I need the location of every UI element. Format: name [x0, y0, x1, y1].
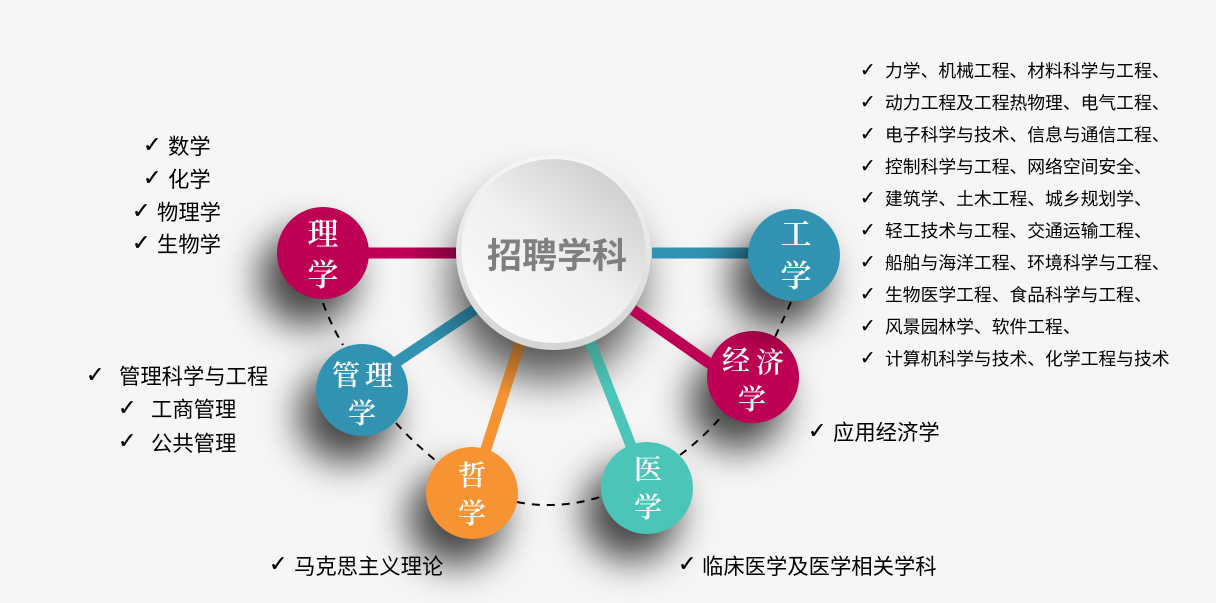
list: 工学: 生物医学工程、食品科学与工程、 [885, 285, 1152, 305]
node: 经济学: 学 [738, 384, 766, 416]
node: 管理学: 管 [332, 360, 360, 392]
list: 工学: 电子科学与技术、信息与通信工程、 [885, 125, 1170, 145]
node: 哲学: 学 [458, 498, 486, 530]
list: 医学: 临床医学及医学相关学科 [702, 555, 937, 579]
connector: 哲学 [485, 343, 520, 452]
node: 工学 [748, 209, 840, 301]
list: 理学: ✓ [143, 166, 161, 191]
central hub [456, 155, 651, 350]
list: 经济学: 应用经济学 [833, 421, 940, 445]
list: 哲学: 马克思主义理论 [294, 555, 443, 579]
list: 管理学: 管理科学与工程 [119, 365, 268, 389]
connector: 经济学 [633, 310, 716, 368]
node shadows [259, 230, 785, 566]
list: 经济学: ✓ [808, 419, 826, 444]
node: 医学: 医 [634, 454, 662, 486]
dashed arc [323, 302, 791, 505]
node: 哲学 [426, 447, 518, 539]
list: 工学: 船舶与海洋工程、环境科学与工程、 [885, 253, 1170, 273]
list: 理学: ✓ [143, 133, 161, 158]
connector: 医学 [590, 341, 635, 456]
list: 工学: ✓ [860, 316, 876, 337]
node: 理学: 理 [308, 217, 338, 252]
list: 管理学: 公共管理 [151, 432, 236, 456]
list: 工学 [860, 60, 1170, 369]
list: 工学: ✓ [860, 284, 876, 305]
connector: 理学 [365, 248, 460, 258]
connector: 工学 [652, 248, 752, 258]
node: 经济学: 济 [756, 347, 784, 379]
list: 理学: 物理学 [157, 201, 221, 225]
node: 理学: 学 [308, 258, 338, 293]
node: 经济学: 经 [722, 345, 751, 377]
list: 理学 [132, 133, 221, 257]
list: 工学: ✓ [860, 60, 876, 81]
node: 理学 [277, 207, 369, 299]
node: 管理学 [316, 344, 408, 436]
list: 管理学 [86, 363, 268, 456]
list: 工学: 计算机科学与技术、化学工程与技术 [885, 349, 1170, 369]
list: 工学: ✓ [860, 252, 876, 273]
list: 工学: 建筑学、土木工程、城乡规划学、 [885, 189, 1152, 209]
list: 工学: 风景园林学、软件工程、 [885, 317, 1081, 337]
list: 工学: 力学、机械工程、材料科学与工程、 [885, 61, 1170, 81]
node: 哲学: 哲 [458, 460, 486, 492]
list: 理学: 化学 [168, 168, 211, 192]
list: 管理学: ✓ [86, 363, 104, 388]
list: 工学: ✓ [860, 156, 876, 177]
list: 工学: 轻工技术与工程、交通运输工程、 [885, 221, 1152, 241]
node: 医学 [601, 442, 693, 534]
connector: 管理学 [392, 308, 477, 365]
list: 工学: ✓ [860, 92, 876, 113]
node: 医学: 学 [634, 492, 662, 524]
node: 工学: 学 [780, 259, 812, 294]
central hub: 招聘学科 [487, 237, 627, 276]
node: 工学: 工 [780, 217, 812, 252]
list: 理学: ✓ [132, 231, 150, 256]
list: 工学: ✓ [860, 220, 876, 241]
list: 管理学: ✓ [118, 396, 136, 421]
list: 管理学: ✓ [118, 429, 136, 454]
shadow: 工学 [730, 232, 826, 328]
list: 理学: 生物学 [157, 233, 221, 257]
list: 工学: 动力工程及工程热物理、电气工程、 [885, 93, 1170, 113]
list: 工学: ✓ [860, 124, 876, 145]
node: 管理学: 学 [348, 398, 376, 430]
list: 工学: 控制科学与工程、网络空间安全、 [885, 157, 1152, 177]
list: 管理学: 工商管理 [151, 398, 236, 422]
list: 医学: ✓ [678, 552, 696, 577]
hub shadow [451, 190, 641, 380]
list: 理学: 数学 [168, 135, 211, 159]
list: 工学: ✓ [860, 348, 876, 369]
node: 经济学 [707, 331, 799, 423]
list: 理学: ✓ [132, 199, 150, 224]
node: 管理学: 理 [365, 361, 393, 392]
list: 工学: ✓ [860, 188, 876, 209]
list: 哲学: ✓ [269, 552, 287, 577]
